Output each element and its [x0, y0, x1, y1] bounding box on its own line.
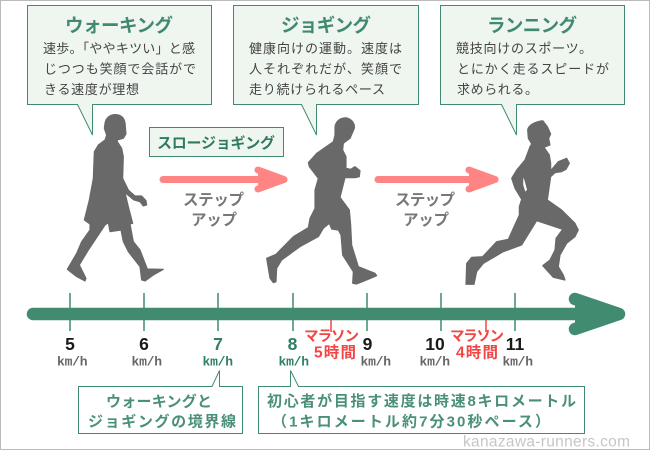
- text: step up 2: アップ: [403, 211, 449, 229]
- speed labels: 7: [213, 334, 223, 354]
- label: marathon 4 hours: [450, 329, 504, 362]
- speed labels: km/h: [420, 354, 450, 370]
- callout: jogging: [234, 6, 418, 135]
- callout: boundary of walking and jogging: ウォーキングと: [106, 392, 212, 410]
- label: slow jogging: [150, 128, 284, 156]
- speed labels: km/h: [502, 354, 533, 370]
- text: jogging description: 人それぞれだが、笑顔で: [249, 62, 402, 76]
- speed labels: 10: [425, 334, 445, 354]
- text: step up 1: アップ: [191, 211, 237, 229]
- speed labels: 5: [65, 334, 75, 354]
- speed axis arrow: [33, 293, 619, 332]
- figure: jogger silhouette: [267, 118, 377, 284]
- speed labels: km/h: [202, 354, 233, 370]
- speed labels: 9: [363, 334, 373, 354]
- text: jogging description: 健康向けの運動。速度は: [249, 41, 402, 56]
- text: walking description: 速歩。「ややキツい」と感: [43, 41, 195, 56]
- text: jogging description: [249, 41, 402, 97]
- text: walking description: きる速度が理想: [44, 82, 139, 97]
- speed labels: 11: [506, 334, 525, 354]
- speed labels: 6: [139, 334, 149, 354]
- figure: runner silhouette: [466, 121, 578, 284]
- heading: walking: ウォーキング: [65, 15, 173, 36]
- text: walking description: [43, 41, 196, 97]
- heading: running: ランニング: [487, 15, 577, 36]
- arrow: step up 1: [163, 170, 284, 189]
- watermark: kanazawa-runners.com: [463, 434, 630, 450]
- callout: beginner target speed: [258, 370, 584, 434]
- arrow: step up 2: [378, 170, 495, 189]
- text: running description: 求められる。: [457, 82, 538, 97]
- label: marathon 5 hours: マラソン: [304, 329, 359, 345]
- text: running description: [456, 41, 609, 97]
- callout: boundary of walking and jogging: [78, 370, 242, 434]
- label: marathon 5 hours: [304, 329, 359, 362]
- text: step up 2: [395, 191, 455, 229]
- text: step up 2: ステップ: [395, 191, 455, 209]
- label: marathon 4 hours: 4時間: [456, 344, 498, 362]
- speed labels: km/h: [360, 354, 391, 370]
- text: jogging description: 走り続けられるペース: [249, 82, 385, 97]
- speed labels: km/h: [278, 354, 309, 370]
- heading: jogging: ジョギング: [281, 15, 371, 36]
- text: running description: とにかく走るスピードが: [457, 62, 609, 76]
- callout: beginner target speed: （1キロメートル約7分30秒ペース）: [272, 412, 550, 430]
- callout: walking: [28, 6, 212, 135]
- speed labels: [57, 334, 533, 370]
- text: running description: 競技向けのスポーツ。: [456, 41, 592, 56]
- callout: running: [440, 6, 624, 135]
- callout: beginner target speed: 初心者が目指す速度は時速8キロメートル: [267, 392, 576, 410]
- callout: boundary of walking and jogging: ジョギングの境界線: [88, 412, 236, 430]
- label: slow jogging: スロージョギング: [157, 134, 275, 152]
- label: marathon 5 hours: 5時間: [314, 344, 356, 362]
- text: step up 1: ステップ: [183, 191, 244, 209]
- speed labels: km/h: [57, 354, 88, 370]
- text: step up 1: [183, 191, 244, 229]
- speed labels: 8: [288, 334, 298, 354]
- speed labels: km/h: [132, 354, 162, 370]
- label: marathon 4 hours: マラソン: [450, 329, 504, 345]
- text: walking description: じつつも笑顔で会話がで: [44, 62, 196, 76]
- figure: walker silhouette: [67, 115, 163, 281]
